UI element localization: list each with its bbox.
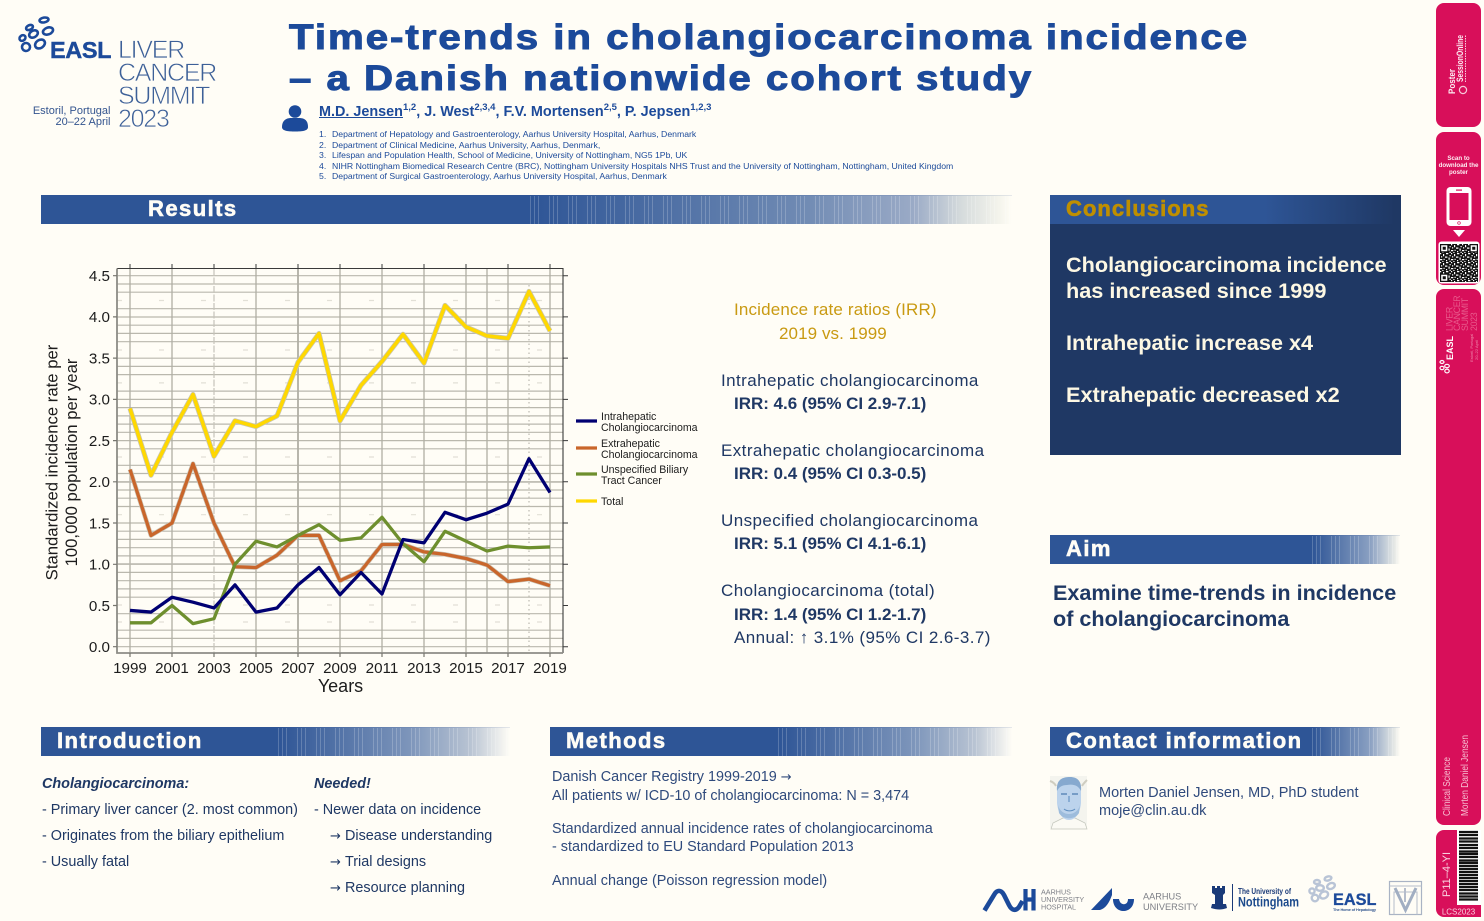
panel: Conclusions bbox=[1050, 224, 1401, 455]
y axis tick labels: 3.0 bbox=[89, 392, 110, 408]
conclusion: increase since 1999: Cholangiocarcinoma incidence bbox=[1066, 252, 1387, 277]
logo: Aarhus University Hospital bbox=[982, 888, 1084, 912]
affiliations: Lifespan and Population Health, School of Medicine, University of Nottingham, NG5 1Pb, UK bbox=[332, 150, 687, 160]
intro: needed bbox=[314, 776, 492, 896]
intro: needed: Disease understanding bbox=[345, 828, 492, 844]
x axis tick labels bbox=[113, 660, 567, 677]
y axis tick labels: 0.0 bbox=[89, 639, 110, 656]
panel: summit and session details: 2023 bbox=[1469, 312, 1479, 331]
x axis tick labels: 2013 bbox=[407, 660, 441, 677]
panel heading: Conclusions: Conclusions bbox=[1066, 196, 1210, 221]
affiliations: 4. bbox=[319, 161, 326, 171]
series: extrahepatic bbox=[130, 464, 550, 586]
affiliations: 3. bbox=[319, 150, 326, 160]
logo: EASL The Home of Hepatology: EASL bbox=[1333, 891, 1376, 909]
summit name: CANCER bbox=[118, 59, 216, 87]
panel heading: Results bbox=[41, 195, 1012, 224]
affiliations: 5. bbox=[319, 171, 326, 181]
panel: summit and session details: CANCER bbox=[1452, 296, 1462, 331]
EASL wordmark: EASL bbox=[50, 37, 111, 63]
panel: summit and session details: EASL bbox=[1445, 335, 1455, 360]
methods: standardization: - standardized to EU Standard Population 2013 bbox=[552, 839, 854, 855]
intro: needed: - Newer data on incidence bbox=[314, 802, 481, 818]
x axis tick labels: 2003 bbox=[197, 660, 231, 677]
intro: cholangiocarcinoma facts: - Originates from the biliary epithelium bbox=[42, 828, 284, 844]
legend: Intrahepatic bbox=[601, 411, 657, 423]
logo: University of Nottingham: The University of bbox=[1238, 887, 1291, 896]
logo: Aarhus University Hospital: AARHUS bbox=[1041, 888, 1071, 896]
legend: Cholangiocarcinoma bbox=[601, 422, 698, 434]
contact details bbox=[1099, 785, 1359, 819]
intro: cholangiocarcinoma facts bbox=[42, 776, 298, 870]
conclusion: extrahepatic: Extrahepatic decreased x2 bbox=[1066, 382, 1340, 407]
IRR: unspecified: Unspecified cholangiocarcinoma bbox=[721, 511, 978, 530]
panel: poster code and barcode bbox=[1436, 830, 1481, 917]
IRR: extrahepatic: Extrahepatic cholangiocarcinoma bbox=[721, 441, 984, 460]
IRR: total: Cholangiocarcinoma (total) bbox=[721, 581, 935, 600]
affiliations: Department of Hepatology and Gastroenterology, Aarhus University Hospital, Aarhus, Denmark bbox=[332, 129, 696, 139]
summit name: LIVER bbox=[118, 36, 184, 64]
methods: registry: Danish Cancer Registry 1999-2019 bbox=[552, 769, 777, 785]
panel heading: Methods bbox=[550, 727, 1012, 756]
sidebar bbox=[1436, 3, 1481, 917]
methods: registry: All patients w/ ICD-10 of cholangiocarcinoma: N = 3,474 bbox=[552, 788, 909, 804]
IRR: unspecified bbox=[721, 511, 978, 553]
conclusion: increase since 1999: has increased since 1999 bbox=[1066, 278, 1326, 303]
logo: University of Nottingham bbox=[1211, 884, 1299, 911]
panel: scan to download: Scan to bbox=[1447, 155, 1470, 162]
y axis tick labels: 4.0 bbox=[89, 309, 110, 326]
legend: Total bbox=[601, 496, 623, 508]
logo: square monogram bbox=[1388, 880, 1422, 916]
icon: author bbox=[282, 105, 308, 132]
IRR: intrahepatic: Intrahepatic cholangiocarcinoma bbox=[721, 371, 979, 390]
panel: summit and session details: 20–22 April bbox=[1474, 340, 1479, 360]
panel: Poster Session Online bbox=[1436, 3, 1481, 127]
x axis tick labels: 1999 bbox=[113, 660, 147, 677]
panel heading: Introduction: Introduction bbox=[57, 728, 203, 753]
panel heading: Aim: Aim bbox=[1066, 536, 1112, 561]
panel heading: Conclusions bbox=[1050, 195, 1401, 224]
conclusion: increase since 1999 bbox=[1066, 252, 1387, 303]
IRR: total: Annual: ↑ 3.1% (95% CI 2.6-3.7) bbox=[734, 628, 991, 647]
y axis title: Standardized incidence rate per bbox=[42, 344, 62, 580]
x axis tick labels: 2009 bbox=[323, 660, 357, 677]
logo: EASL The Home of Hepatology bbox=[1308, 875, 1377, 912]
intro: needed: → bbox=[330, 829, 341, 844]
legend: Cholangiocarcinoma bbox=[601, 449, 698, 461]
methods: registry: → bbox=[781, 770, 792, 785]
IRR: extrahepatic: IRR: 0.4 (95% CI 0.3-0.5) bbox=[734, 464, 926, 483]
line chart: standardized incidence rate bbox=[42, 264, 698, 696]
legend bbox=[576, 411, 698, 508]
IRR: extrahepatic bbox=[721, 441, 984, 483]
x axis tick labels: 2011 bbox=[366, 660, 398, 677]
intro: cholangiocarcinoma facts: - Usually fatal bbox=[42, 854, 129, 870]
legend: Extrahepatic bbox=[601, 438, 661, 450]
x axis title: Years bbox=[318, 676, 363, 696]
y axis tick labels: 1.0 bbox=[89, 556, 110, 574]
intro: needed: Resource planning bbox=[345, 880, 465, 896]
panel heading: Introduction bbox=[41, 727, 510, 756]
series: total bbox=[130, 291, 550, 475]
IRR: total bbox=[721, 581, 991, 647]
y axis tick labels: 2.0 bbox=[89, 474, 110, 491]
intro: needed: Trial designs bbox=[345, 854, 426, 870]
y axis tick labels: 4.5 bbox=[89, 268, 110, 285]
panel: Poster Session Online: Poster bbox=[1447, 69, 1458, 94]
panel: summit and session details bbox=[1436, 289, 1481, 825]
contact details: Morten Daniel Jensen, MD, PhD student bbox=[1099, 785, 1359, 801]
summit name: SUMMIT bbox=[118, 82, 209, 110]
location and dates bbox=[33, 105, 110, 128]
photo: author portrait bbox=[1050, 776, 1088, 830]
y axis tick labels: 0.5 bbox=[89, 598, 110, 615]
panel heading: Aim bbox=[1050, 535, 1400, 564]
IRR: unspecified: IRR: 5.1 (95% CI 4.1-6.1) bbox=[734, 534, 926, 553]
IRR heading: Incidence rate ratios (IRR) bbox=[734, 300, 937, 319]
methods: model: Annual change (Poisson regression model) bbox=[552, 873, 827, 889]
summit name bbox=[118, 36, 216, 133]
affiliations: Department of Clinical Medicine, Aarhus University, Aarhus, Denmark, bbox=[332, 140, 600, 150]
IRR: intrahepatic: IRR: 4.6 (95% CI 2.9-7.1) bbox=[734, 394, 926, 413]
panel: summit and session details: SUMMIT bbox=[1460, 297, 1470, 331]
series: unspecified biliary tract cancer bbox=[130, 517, 550, 624]
title: – a Danish nationwide cohort study bbox=[289, 59, 1033, 98]
panel: poster code and barcode: LCS2023 bbox=[1442, 908, 1476, 916]
logo: Aarhus University: UNIVERSITY bbox=[1143, 902, 1198, 912]
panel heading: Contact information bbox=[1050, 727, 1400, 756]
panel: summit and session details: LIVER bbox=[1444, 307, 1454, 331]
x axis tick labels: 2007 bbox=[281, 660, 315, 677]
logo: Aarhus University: AARHUS bbox=[1143, 892, 1181, 902]
x axis tick labels: 2005 bbox=[239, 660, 273, 677]
panel: scan to download: download the bbox=[1439, 162, 1479, 169]
authors: M.D. Jensen1,2, J. West2,3,4, F.V. Mortensen2,5, P. Jepsen1,2,3 bbox=[319, 102, 711, 120]
panel heading: Contact information: Contact information bbox=[1066, 728, 1303, 753]
x axis tick labels: 2019 bbox=[533, 660, 567, 677]
panel: summit and session details: Clinical Science bbox=[1442, 757, 1453, 816]
panel: summit and session details: Estoril, Portugal bbox=[1469, 334, 1474, 362]
affiliations: 1. bbox=[319, 129, 326, 139]
contact details: moje@clin.au.dk bbox=[1099, 803, 1206, 819]
x axis tick labels: 2015 bbox=[449, 660, 483, 677]
IRR heading second line: 2019 vs. 1999 bbox=[779, 324, 887, 343]
logo: EASL The Home of Hepatology: The Home of Hepatology bbox=[1333, 907, 1377, 912]
panel: poster code and barcode: P11–4-YI bbox=[1441, 852, 1453, 897]
plot grid bbox=[113, 264, 568, 657]
panel: Methods bbox=[552, 769, 933, 889]
affiliations: Department of Surgical Gastroenterology, Aarhus University Hospital, Aarhus, Denmark bbox=[332, 171, 667, 181]
intro: cholangiocarcinoma facts: Cholangiocarcinoma: bbox=[42, 776, 189, 792]
panel: scan to download: poster bbox=[1449, 169, 1469, 176]
legend: Tract Cancer bbox=[601, 475, 662, 487]
summit name: 2023 bbox=[118, 105, 169, 133]
y axis tick labels bbox=[89, 268, 110, 656]
x axis tick labels: 2001 bbox=[155, 660, 189, 677]
intro: needed: → bbox=[330, 881, 341, 896]
aim text: of cholangiocarcinoma bbox=[1053, 606, 1289, 631]
affiliations: NIHR Nottingham Biomedical Research Centre (BRC), Nottingham University Hospitals NHS Trust and the University of Nottingham, Nottingham, United Kingdom bbox=[332, 161, 953, 171]
panel heading: Results: Results bbox=[148, 196, 238, 221]
logo: Aarhus University Hospital: HOSPITAL bbox=[1041, 902, 1076, 912]
y axis tick labels: 2.5 bbox=[89, 433, 110, 450]
legend: Unspecified Biliary bbox=[601, 464, 689, 476]
IRR: intrahepatic bbox=[721, 371, 979, 413]
affiliations: 2. bbox=[319, 140, 326, 150]
series: intrahepatic bbox=[130, 459, 550, 612]
methods: standardization: Standardized annual incidence rates of cholangiocarcinoma bbox=[552, 821, 933, 837]
panel: summit and session details: Morten Daniel Jensen bbox=[1460, 735, 1471, 816]
title bbox=[288, 18, 1249, 98]
logo: Aarhus University bbox=[1091, 888, 1198, 912]
IRR: total: IRR: 1.4 (95% CI 1.2-1.7) bbox=[734, 605, 926, 624]
panel heading: Methods: Methods bbox=[566, 728, 667, 753]
intro: needed: Needed! bbox=[314, 776, 371, 792]
panel: scan to download bbox=[1436, 132, 1481, 285]
intro: needed: → bbox=[330, 855, 341, 870]
logo: University of Nottingham: Nottingham bbox=[1238, 894, 1299, 910]
incidence rate ratios block bbox=[721, 300, 991, 647]
panel: Introduction bbox=[42, 776, 492, 896]
y axis tick labels: 1.5 bbox=[89, 516, 110, 532]
panel: Poster Session Online: SessionOnline bbox=[1455, 35, 1466, 82]
EASL cells in sidebar bbox=[1440, 360, 1449, 373]
affiliations bbox=[319, 129, 953, 181]
methods: registry bbox=[552, 769, 909, 804]
location and dates: Estoril, Portugal bbox=[33, 105, 110, 117]
logo: EASL Liver Cancer Summit 2023 bbox=[18, 16, 216, 133]
aim text: Examine time-trends in incidence bbox=[1053, 580, 1396, 605]
aim text bbox=[1053, 580, 1396, 631]
x axis tick labels: 2017 bbox=[491, 660, 525, 677]
y axis tick labels: 3.5 bbox=[89, 350, 110, 368]
conclusion: intrahepatic: Intrahepatic increase x4 bbox=[1066, 330, 1313, 355]
intro: cholangiocarcinoma facts: - Primary liver cancer (2. most common) bbox=[42, 802, 298, 818]
y axis title second line: 100,000 population per year bbox=[62, 358, 81, 566]
logo: Aarhus University Hospital: UNIVERSITY bbox=[1041, 895, 1084, 904]
title: Time-trends in cholangiocarcinoma incidence bbox=[289, 18, 1249, 57]
axes bbox=[113, 264, 568, 657]
location and dates: 20–22 April bbox=[55, 116, 110, 128]
icon: EASL cell cluster bbox=[18, 16, 54, 52]
methods: standardization bbox=[552, 821, 933, 855]
